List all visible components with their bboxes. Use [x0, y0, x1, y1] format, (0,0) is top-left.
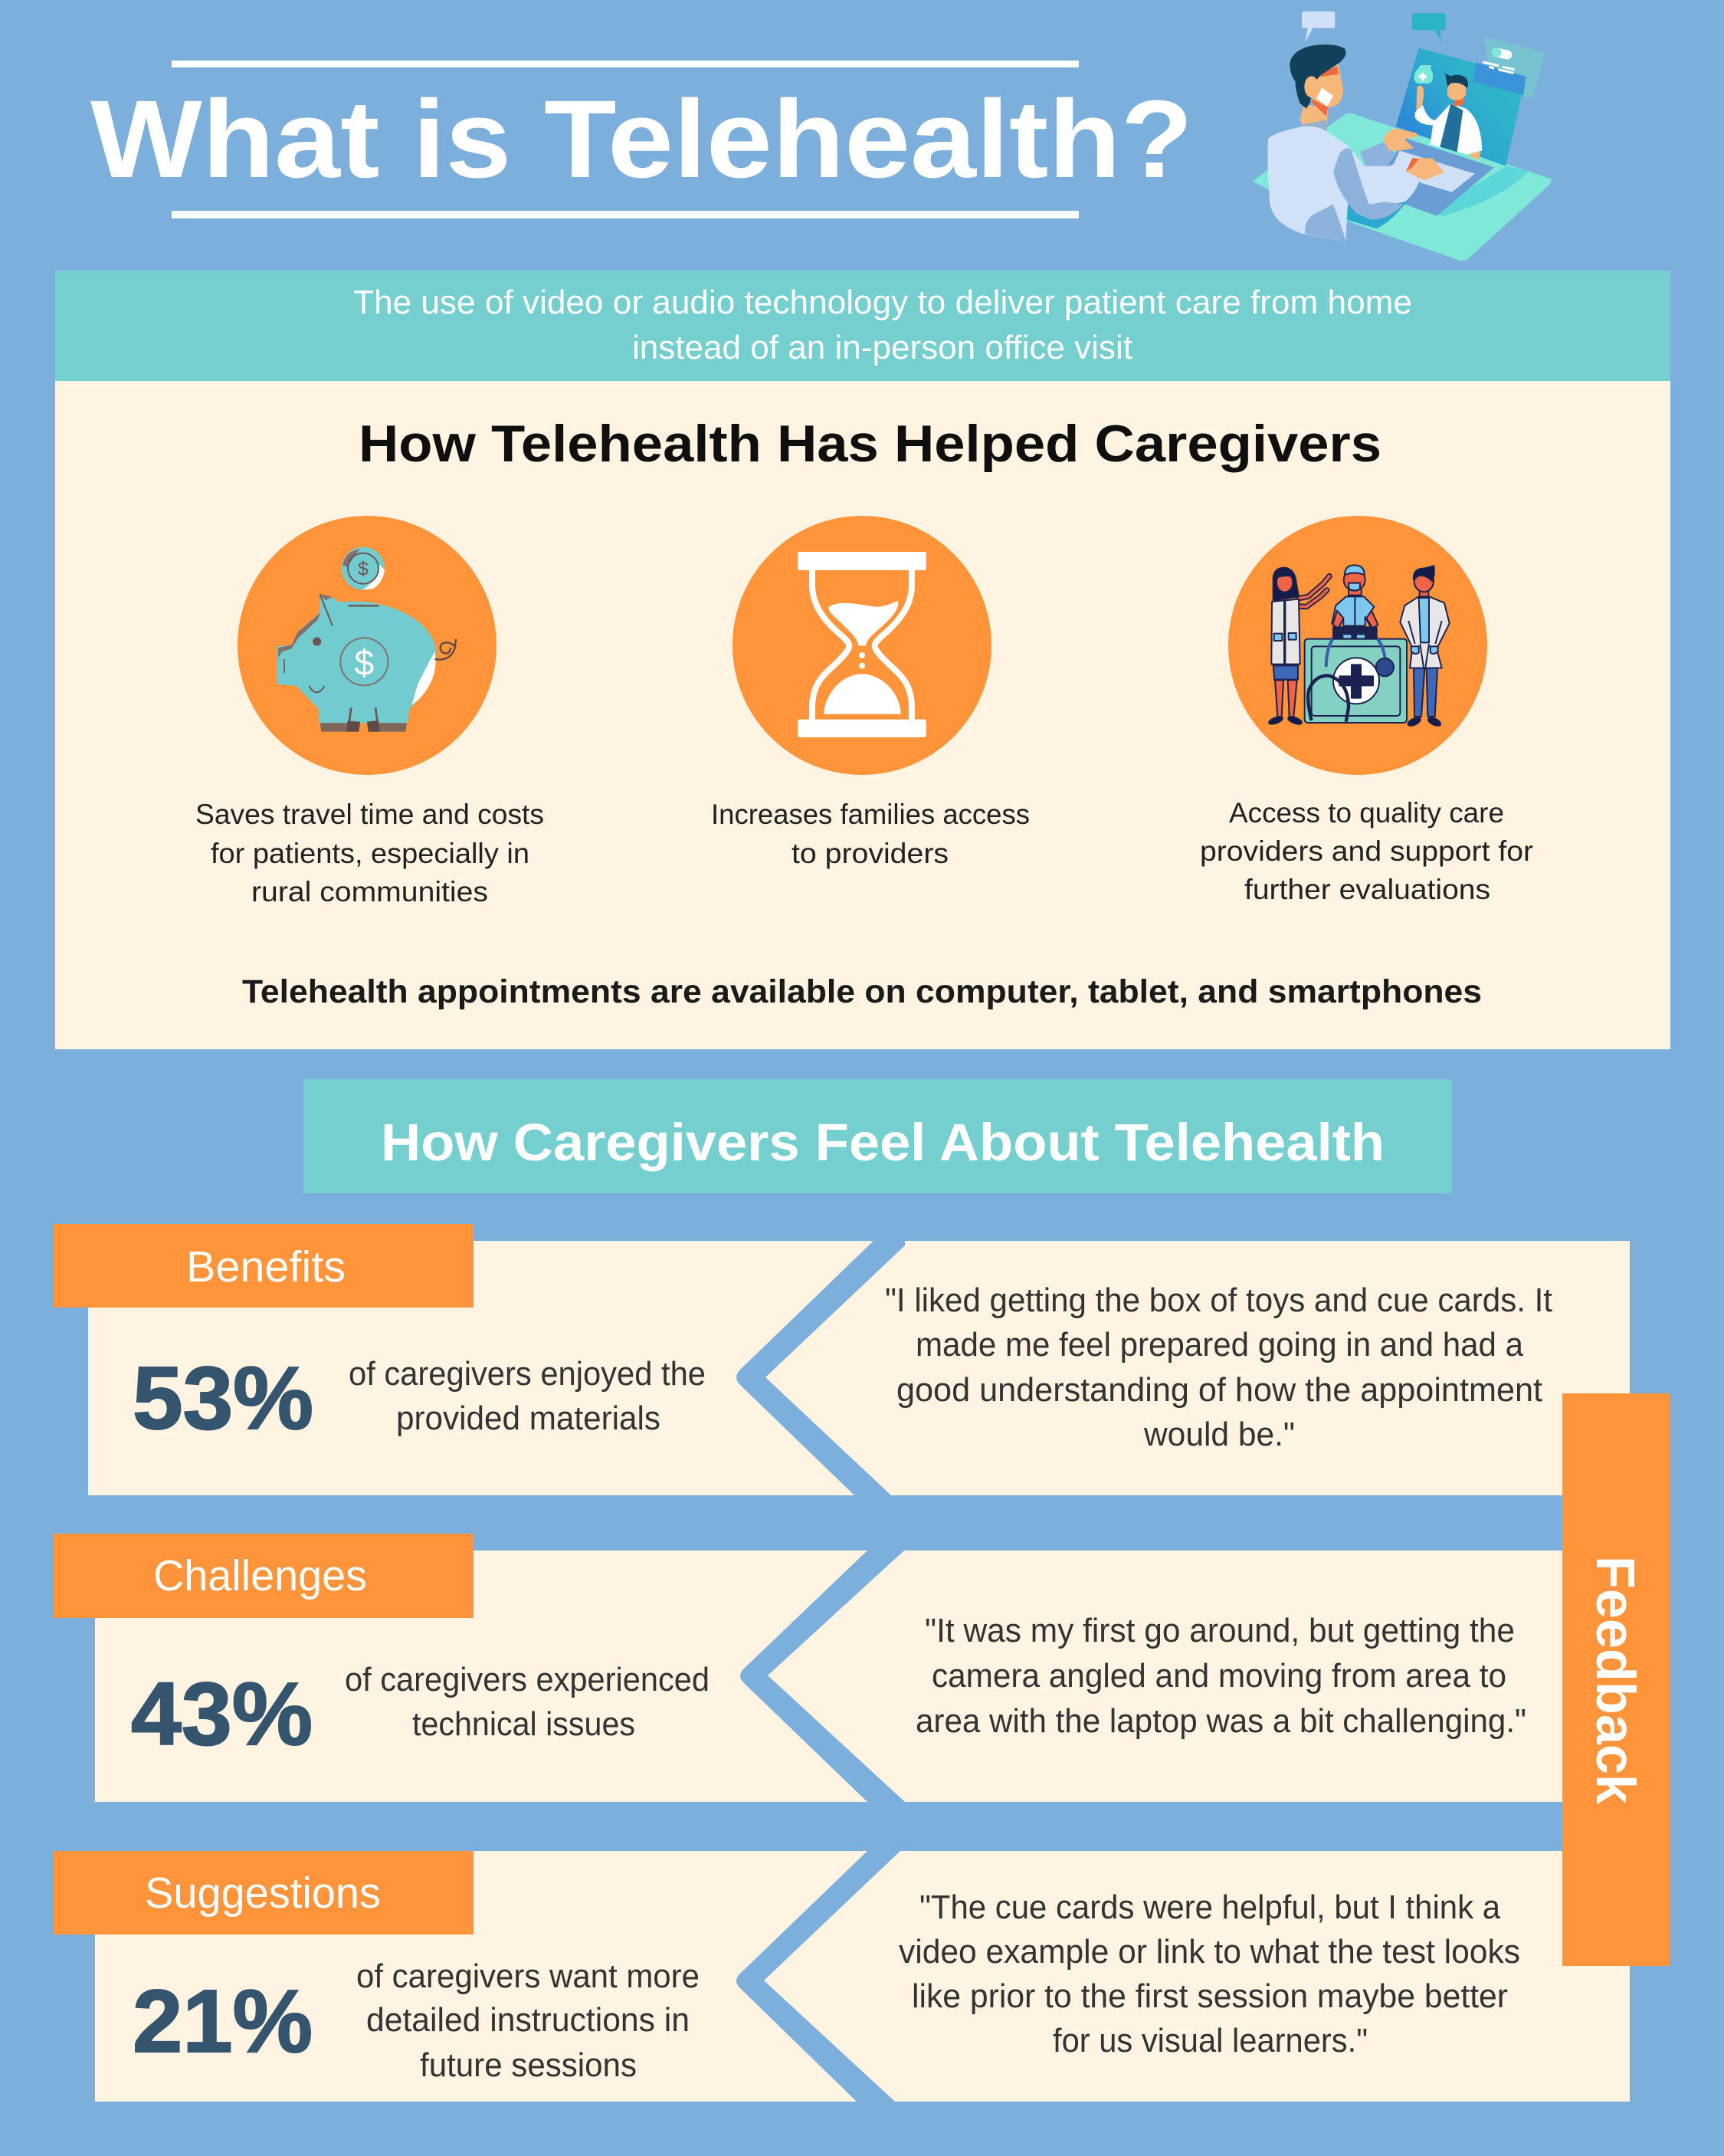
- icon: care providers: [1228, 516, 1487, 775]
- quote: camera angled and moving from area to: [932, 1657, 1506, 1695]
- icon: piggy bank: $: [354, 643, 374, 683]
- quote: "It was my first go around, but getting the: [925, 1612, 1515, 1649]
- illustration: telehealth video consultation: [1253, 11, 1552, 261]
- icon: piggy bank: $: [358, 560, 369, 580]
- label: benefits: [53, 1224, 474, 1308]
- caption: increases access: to providers: [792, 838, 949, 869]
- stat description: future sessions: [420, 2046, 637, 2084]
- definition banner: instead of an in-person office visit: [632, 329, 1132, 366]
- caption: quality care: [1200, 797, 1533, 905]
- stat description: detailed instructions in: [366, 2001, 690, 2039]
- availability note: Telehealth appointments are available on computer, tablet, and smartphones: [242, 973, 1482, 1010]
- quote: [885, 1281, 1552, 1453]
- caption: saves travel: Saves travel time and costs: [195, 799, 544, 830]
- panel: how telehealth has helped caregivers: [55, 381, 1670, 1049]
- stat description: provided materials: [396, 1400, 660, 1437]
- stat description: of caregivers want more: [356, 1957, 700, 1995]
- quote: good understanding of how the appointment: [896, 1371, 1542, 1409]
- section heading: how caregivers feel: How Caregivers Feel About Telehealth: [381, 1113, 1385, 1172]
- quote: would be.": [1143, 1416, 1295, 1453]
- definition banner: The use of video or audio technology to deliver patient care from home: [353, 284, 1412, 321]
- feedback side tab: Feedback: [1585, 1556, 1645, 1805]
- stat description: [345, 1661, 710, 1743]
- icon: piggy bank: [238, 516, 497, 775]
- label: benefits: Benefits: [186, 1242, 346, 1291]
- stat: 21%: 21%: [133, 1971, 313, 2071]
- panel: challenges: [53, 1534, 1630, 1802]
- caption: saves travel: for patients, especially in: [211, 838, 529, 869]
- stat description: [356, 1957, 700, 2084]
- label: suggestions: Suggestions: [145, 1869, 381, 1918]
- stat: 43%: 43%: [131, 1664, 313, 1764]
- panel: suggestions: [53, 1851, 1630, 2102]
- panel: benefits: [53, 1224, 1630, 1495]
- quote: like prior to the first session maybe better: [912, 1977, 1508, 2015]
- caption: quality care: further evaluations: [1244, 874, 1490, 905]
- quote: [916, 1612, 1526, 1740]
- quote: video example or link to what the test looks: [899, 1933, 1520, 1971]
- label: challenges: Challenges: [153, 1551, 367, 1600]
- title: What is Telehealth?: [90, 77, 1193, 201]
- quote: area with the laptop was a bit challenging.": [916, 1702, 1526, 1740]
- quote: for us visual learners.": [1053, 2022, 1368, 2059]
- quote: made me feel prepared going in and had a: [916, 1326, 1523, 1363]
- feedback side tab: [1562, 1393, 1670, 1966]
- quote: [899, 1889, 1520, 2059]
- stat: 53%: 53%: [133, 1348, 313, 1448]
- stat description: [349, 1355, 706, 1437]
- caption: saves travel: rural communities: [251, 876, 488, 907]
- caption: quality care: providers and support for: [1200, 835, 1533, 867]
- stat description: of caregivers enjoyed the: [349, 1355, 706, 1393]
- quote: "The cue cards were helpful, but I think a: [919, 1889, 1501, 1926]
- definition banner: [55, 271, 1670, 381]
- label: challenges: [53, 1534, 474, 1618]
- icon: hourglass: [733, 516, 991, 775]
- quote: "I liked getting the box of toys and cue cards. It: [885, 1281, 1552, 1319]
- panel heading: How Telehealth Has Helped Caregivers: [359, 415, 1381, 473]
- stat description: technical issues: [412, 1705, 635, 1743]
- caption: saves travel: [195, 799, 544, 907]
- caption: increases access: [711, 799, 1030, 869]
- caption: increases access: Increases families access: [711, 799, 1030, 830]
- label: suggestions: [53, 1851, 474, 1934]
- caption: quality care: Access to quality care: [1229, 797, 1504, 829]
- section heading: how caregivers feel: [303, 1079, 1452, 1193]
- stat description: of caregivers experienced: [345, 1661, 710, 1698]
